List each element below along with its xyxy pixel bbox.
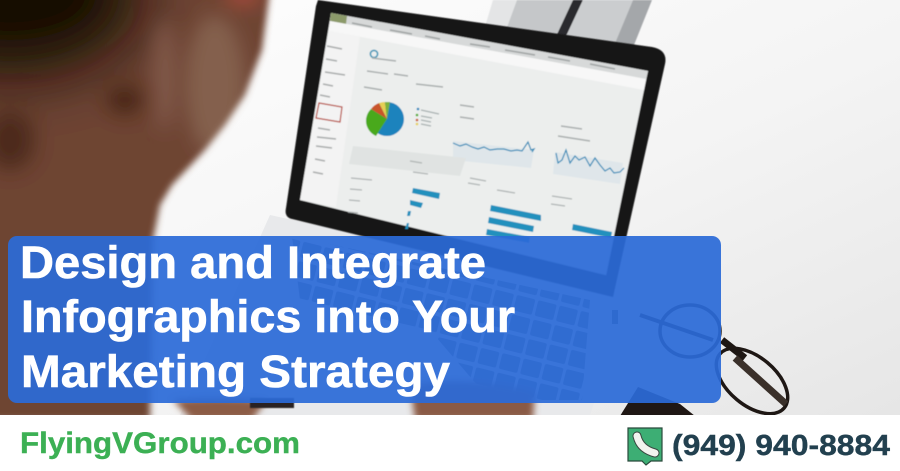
person blurred head and neck xyxy=(0,0,280,430)
near lens xyxy=(714,346,790,415)
laptop bezel xyxy=(286,0,665,297)
conversions table bars xyxy=(572,224,612,238)
dark shadow under panel xyxy=(250,398,294,408)
keyboard keys xyxy=(292,236,590,400)
laptop screen xyxy=(286,0,665,297)
website link: FlyingVGroup.com xyxy=(20,427,300,460)
behavior table bars xyxy=(486,205,541,243)
far lens xyxy=(660,305,720,357)
phone on desk xyxy=(612,310,695,416)
title text xyxy=(20,237,515,397)
title panel xyxy=(8,236,721,403)
sessions line chart xyxy=(453,141,534,168)
acquisition table bars xyxy=(405,188,440,229)
glasses xyxy=(640,304,790,415)
table labels xyxy=(348,161,572,213)
pie legend xyxy=(416,108,439,126)
hands at bottom xyxy=(170,383,540,415)
address bar xyxy=(329,21,646,90)
sidebar menu lines xyxy=(313,46,345,174)
footer bar xyxy=(0,415,900,471)
property ring icon xyxy=(370,50,378,58)
browser tab bar xyxy=(330,13,648,79)
title text: Infographics into Your xyxy=(21,291,515,342)
table header band xyxy=(349,146,466,176)
phone number: (949) 940-8884 xyxy=(672,430,890,462)
screen surface xyxy=(300,13,648,275)
metal stand behind laptop xyxy=(486,0,652,45)
laptop keyboard deck xyxy=(180,215,630,415)
pie chart xyxy=(366,102,404,136)
icon: phone chat bubble xyxy=(628,428,662,465)
tabs xyxy=(352,23,615,69)
sidebar xyxy=(299,166,306,202)
temple arm xyxy=(640,315,713,340)
title text: Design and Integrate xyxy=(20,237,486,288)
chart titles xyxy=(364,58,590,141)
conversions line chart xyxy=(553,150,624,184)
highlighted menu box xyxy=(316,103,342,122)
title text: Marketing Strategy xyxy=(21,346,450,397)
